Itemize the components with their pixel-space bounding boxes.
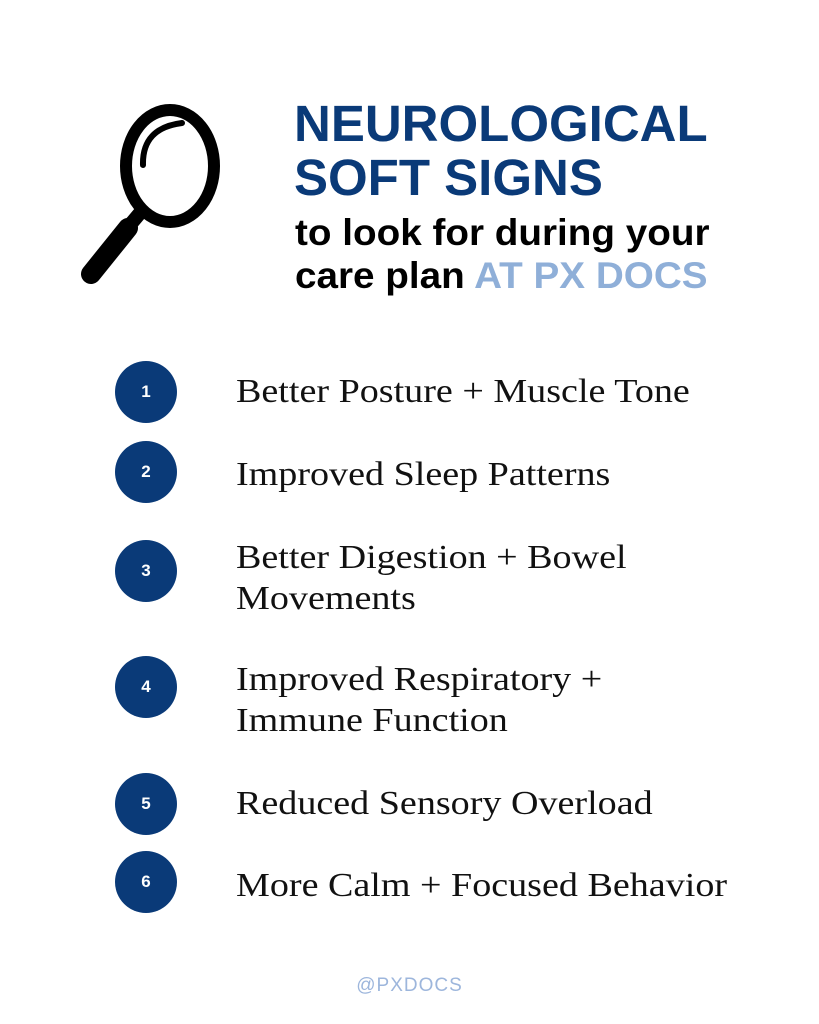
icon: magnifying glass bbox=[81, 104, 220, 284]
title: SOFT SIGNS bbox=[294, 149, 603, 206]
title: NEUROLOGICAL bbox=[294, 95, 708, 152]
list item 5: 5 bbox=[141, 794, 151, 813]
list item 2 bbox=[115, 441, 610, 503]
list item 3: Better Digestion + Bowel bbox=[236, 539, 627, 576]
list item 1: 1 bbox=[141, 382, 151, 401]
list item 3 bbox=[115, 539, 627, 617]
list item 1 bbox=[115, 361, 690, 423]
list item 4: 4 bbox=[141, 677, 151, 696]
list item 6: More Calm + Focused Behavior bbox=[236, 867, 727, 904]
list item 5: Reduced Sensory Overload bbox=[236, 785, 653, 822]
list item 6 bbox=[115, 851, 727, 913]
title: care plan AT PX DOCS bbox=[295, 255, 708, 296]
list item 4: Immune Function bbox=[236, 702, 508, 739]
title: to look for during your bbox=[295, 212, 710, 253]
list item 4: Improved Respiratory + bbox=[236, 661, 602, 698]
footer handle: @PXDOCS bbox=[356, 975, 463, 996]
list item 6: 6 bbox=[141, 872, 151, 891]
list item 4 bbox=[115, 656, 602, 739]
list item 3: Movements bbox=[236, 580, 416, 617]
list item 1: Better Posture + Muscle Tone bbox=[236, 373, 690, 410]
list item 2: 2 bbox=[141, 462, 151, 481]
list item 2: Improved Sleep Patterns bbox=[236, 456, 610, 493]
title bbox=[294, 95, 710, 296]
list item 5 bbox=[115, 773, 653, 835]
list item 3: 3 bbox=[141, 561, 151, 580]
